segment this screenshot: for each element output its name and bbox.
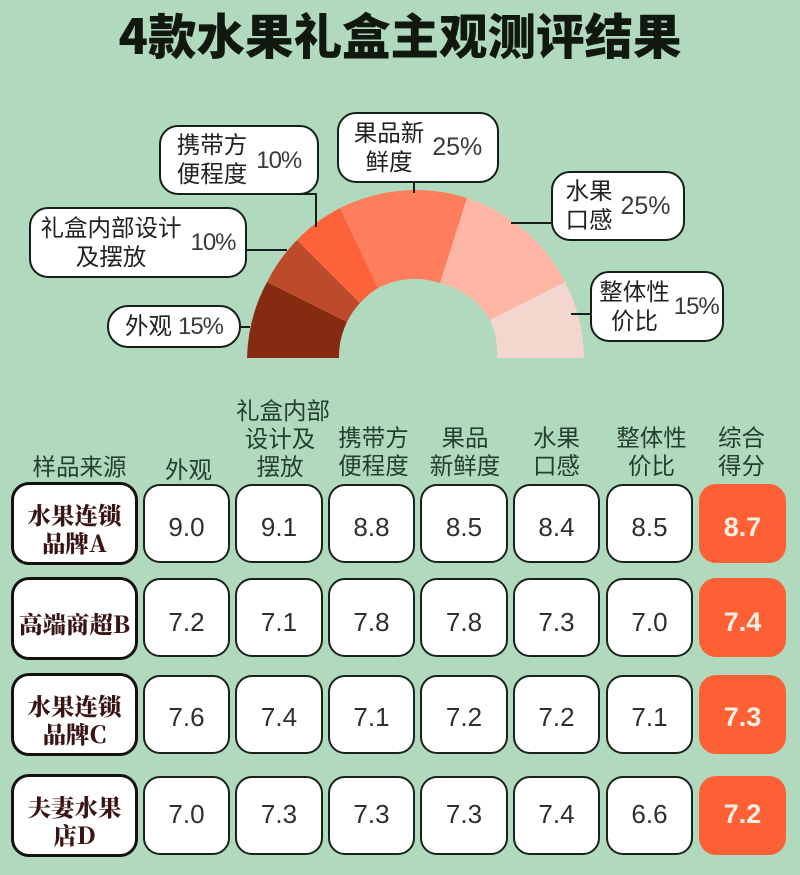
row: 高端商超B: 7.8 [446,606,482,636]
callout: 外观 [107,305,241,348]
source label [11,577,138,660]
source label: 水果连锁 [28,688,122,722]
header: 礼盒内部设计及摆放 [236,398,330,480]
score cells: 7.2 [168,606,205,636]
header: 果品新鲜度: 新鲜度 [430,453,500,479]
row: 夫妻水果店D: 6.6 [631,798,668,828]
segment: 携带方便程度 10% [297,208,378,303]
row: 夫妻水果店D: 7.4 [538,798,575,828]
row: 高端商超B [11,577,786,660]
callout: 水果口感: 水果 [565,178,612,204]
source label [11,482,138,565]
header: 外观: 外观 [165,457,212,483]
callout: 礼盒内部设计及摆放: 及摆放 [76,244,146,270]
row: 水果连锁品牌A: 9.1 [261,512,297,542]
table headers [32,398,765,483]
header: 携带方便程度: 便程度 [338,453,409,479]
row: 高端商超B: 7.1 [261,606,297,636]
row: 水果连锁品牌C: 7.1 [353,702,390,732]
overall score: 7.2 [724,798,761,828]
header: 礼盒内部设计及摆放: 设计及 [245,426,315,452]
header: 综合得分: 综合 [718,425,765,451]
source label: 水果连锁 [28,496,122,530]
callout: 果品新鲜度: 25% [432,133,482,161]
source label [11,774,138,857]
row: 水果连锁品牌C: 7.2 [446,702,482,732]
header: 礼盒内部设计及摆放: 摆放 [256,454,304,480]
overall score [699,484,786,563]
score cells [143,578,230,657]
segment: 整体性价比 15% [490,282,584,358]
row: 水果连锁品牌A: 8.5 [631,512,668,542]
callout: 果品新鲜度 [337,112,499,183]
callout: 外观: 外观 [125,313,172,339]
header: 综合得分: 得分 [718,453,765,479]
header: 水果口感 [533,425,580,479]
callout: 礼盒内部设计及摆放: 礼盒内部设计 [40,214,181,240]
source label [11,673,138,756]
callout: 水果口感: 口感 [565,207,612,233]
segment: 水果口感 25% [440,198,565,320]
header: 水果口感: 口感 [533,453,580,479]
header: 样品来源: 样品来源 [32,454,126,480]
callout: 礼盒内部设计及摆放: 10% [190,229,236,256]
score cells: 7.0 [168,798,205,828]
score cells: 7.6 [168,702,205,732]
callout: 携带方便程度: 携带方 [177,132,247,158]
overall score: 8.7 [724,512,761,542]
callout: 整体性价比: 15% [674,293,719,320]
header: 综合得分 [718,425,765,479]
score cells: 9.0 [168,512,205,542]
callout: 携带方便程度 [159,125,319,195]
header: 果品新鲜度: 果品 [442,425,488,451]
header: 携带方便程度 [338,425,409,479]
score cells [143,776,230,855]
header: 礼盒内部设计及摆放: 礼盒内部 [236,398,330,424]
row: 水果连锁品牌A: 8.4 [538,512,575,542]
row: 水果连锁品牌C: 7.1 [631,702,668,732]
overall score [699,578,786,657]
callout: 礼盒内部设计及摆放 [29,207,247,278]
row: 水果连锁品牌C: 7.2 [538,702,575,732]
overall score [699,776,786,855]
callout: 携带方便程度: 便程度 [177,161,247,187]
leader lines [240,182,592,327]
row: 水果连锁品牌A [11,482,786,565]
source label: 夫妻水果 [28,788,122,822]
overall score [699,675,786,754]
segment: 礼盒内部设计及摆放 10% [267,240,360,322]
semi-donut chart [240,183,590,358]
callout: 水果口感: 25% [620,192,671,220]
row: 水果连锁品牌A: 8.8 [353,512,390,542]
header: 携带方便程度: 携带方 [338,425,409,451]
header: 整体性价比: 价比 [628,453,675,479]
row: 夫妻水果店D: 7.3 [353,798,390,828]
source label: 高端商超B [19,606,130,640]
header: 果品新鲜度 [430,425,500,479]
title: 4款水果礼盒主观测评结果 [118,0,682,68]
overall score: 7.4 [724,606,761,636]
segment: 果品新鲜度 25% [340,190,467,288]
source label: 品牌C [43,716,106,750]
row: 夫妻水果店D: 7.3 [261,798,297,828]
callout: 水果口感 [551,171,685,241]
source label: 品牌A [42,524,107,558]
callout: 果品新鲜度: 果品新 [354,120,424,146]
score cells [143,484,230,563]
callout: 果品新鲜度: 鲜度 [365,148,412,174]
callout: 整体性价比: 整体性 [599,278,670,304]
callout: 整体性价比: 价比 [611,308,658,334]
segment: 外观 15% [247,282,347,358]
score cells [143,675,230,754]
row: 夫妻水果店D [11,774,786,857]
row: 高端商超B: 7.0 [631,606,668,636]
overall score: 7.3 [724,702,761,732]
callout: 携带方便程度: 10% [256,146,301,174]
callout: 整体性价比 [590,271,724,342]
header: 整体性价比 [616,425,687,479]
header: 水果口感: 水果 [533,425,580,451]
row: 高端商超B: 7.8 [353,606,390,636]
row: 夫妻水果店D: 7.3 [446,798,482,828]
row: 水果连锁品牌A: 8.5 [446,512,482,542]
row: 水果连锁品牌C: 7.4 [261,702,297,732]
header: 整体性价比: 整体性 [616,425,687,451]
row: 水果连锁品牌C [11,673,786,756]
row: 高端商超B: 7.3 [538,606,575,636]
callout: 外观: 15% [178,313,223,340]
source label: 店D [53,816,96,850]
